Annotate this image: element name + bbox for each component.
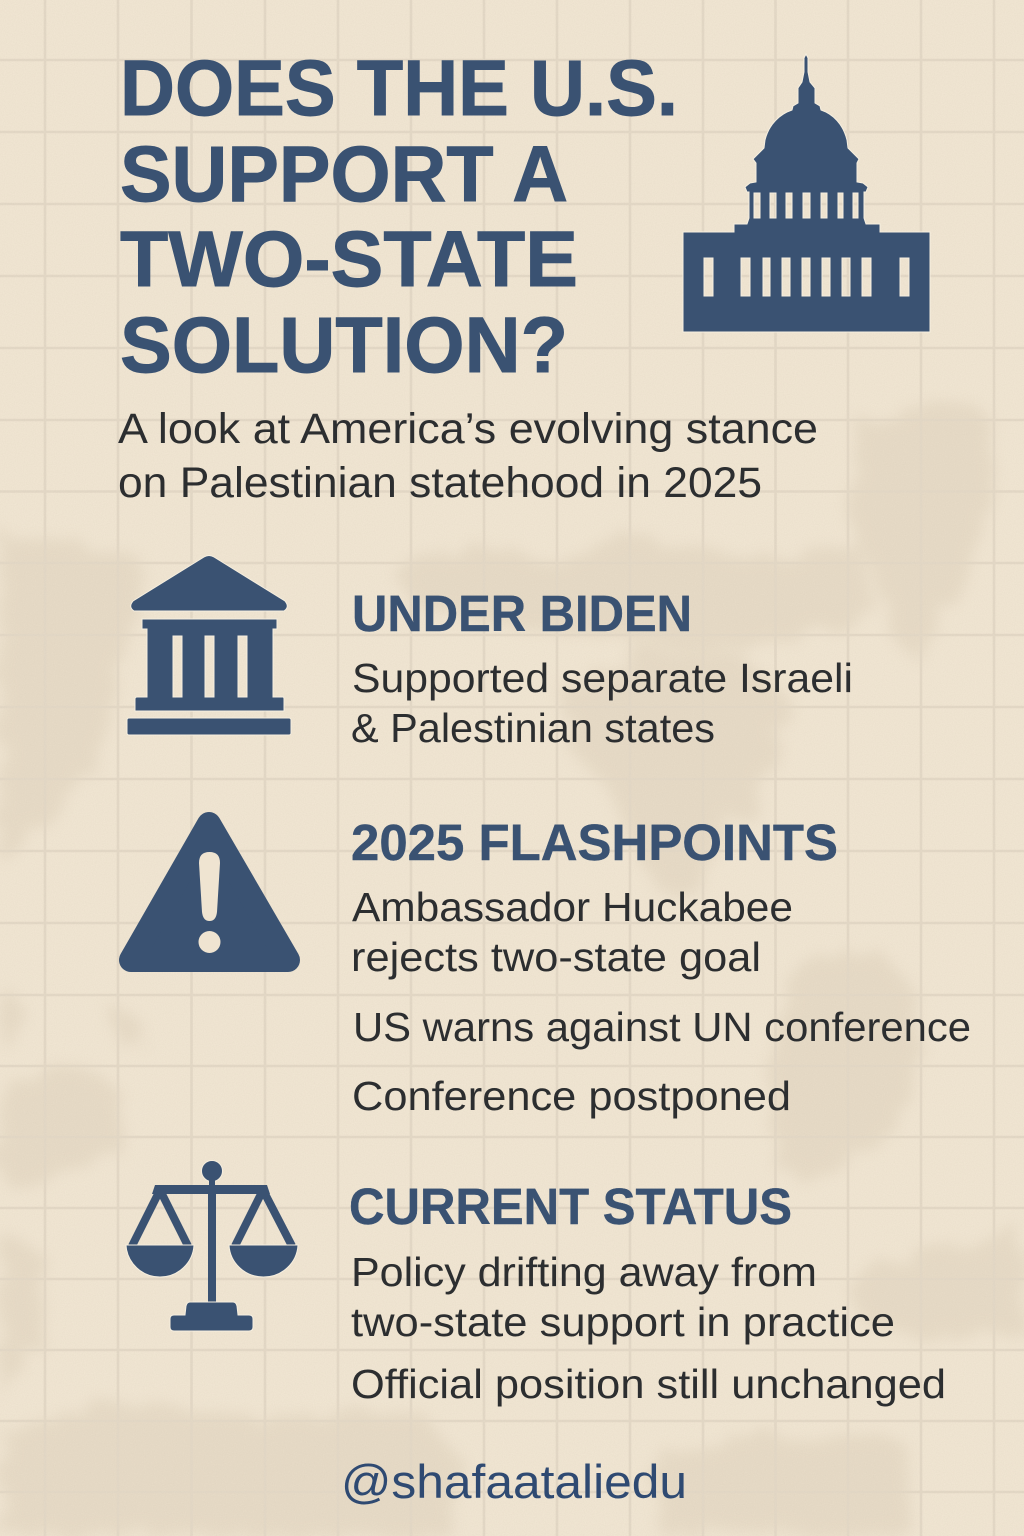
panel: current status <box>126 1160 946 1407</box>
heading: current status: CURRENT STATUS <box>349 1178 792 1235</box>
text: Huckabee: rejects two-state goal <box>351 934 761 980</box>
panel: 2025 flashpoints <box>131 814 971 1119</box>
title: DOES THE U.S. <box>120 43 678 132</box>
subtitle <box>118 405 818 507</box>
background world map <box>0 400 1024 1536</box>
text: Biden policy: & Palestinian states <box>351 705 715 751</box>
footer handle: @shafaataliedu <box>341 1455 687 1508</box>
icon: capitol building <box>683 54 930 332</box>
title <box>120 43 678 389</box>
text: Biden policy: Supported separate Israeli <box>352 655 853 701</box>
heading: under Biden: UNDER BIDEN <box>352 585 692 642</box>
icon: government building <box>127 556 291 735</box>
icon: warning triangle <box>131 824 288 960</box>
heading: 2025 flashpoints: 2025 FLASHPOINTS <box>351 814 838 871</box>
title: TWO-STATE <box>120 214 578 303</box>
text: official position: Official position still unchanged <box>351 1361 946 1407</box>
title: SOLUTION? <box>120 300 568 389</box>
panel: under Biden <box>127 556 853 751</box>
text: policy drift: two-state support in practice <box>351 1299 895 1345</box>
subtitle: on Palestinian statehood in 2025 <box>118 459 762 507</box>
title: SUPPORT A <box>120 129 568 218</box>
text: Huckabee <box>351 884 793 980</box>
text: UN warning: US warns against UN conference <box>353 1004 971 1050</box>
text: Biden policy <box>351 655 853 751</box>
text: conference postponed: Conference postponed <box>352 1073 791 1119</box>
subtitle: A look at America’s evolving stance <box>118 405 818 453</box>
icon: scales of justice <box>126 1160 298 1331</box>
text: policy drift <box>351 1249 895 1345</box>
text: policy drift: Policy drifting away from <box>351 1249 817 1295</box>
text: Huckabee: Ambassador Huckabee <box>352 884 793 930</box>
